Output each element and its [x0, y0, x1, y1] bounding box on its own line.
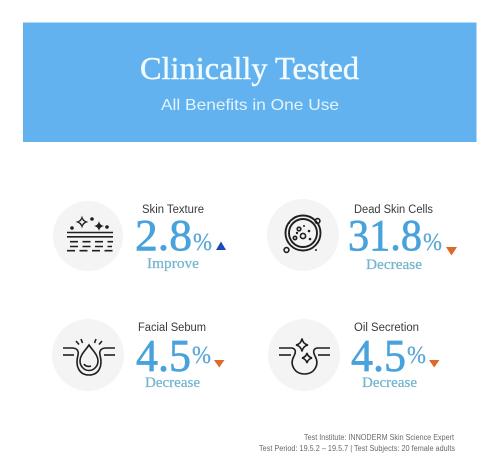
icon: skin texture	[53, 201, 123, 271]
percent sign: %	[407, 342, 426, 369]
result text: Decrease	[366, 257, 422, 273]
panel: facial sebum	[52, 319, 224, 391]
panel: dead skin cells	[267, 199, 457, 273]
header banner	[23, 22, 476, 142]
icon: oil sparkle	[268, 319, 340, 391]
label: Oil Secretion	[354, 322, 419, 334]
value: 2.8	[135, 211, 192, 260]
percent sign: %	[193, 229, 212, 256]
icon: cells	[267, 199, 339, 271]
percent sign: %	[423, 229, 442, 256]
panel: oil secretion	[268, 319, 440, 391]
value: 31.8	[348, 211, 422, 260]
arrow down	[214, 360, 224, 368]
value: 4.5	[136, 330, 191, 381]
result text: Decrease	[362, 375, 417, 391]
panel: skin texture	[53, 201, 226, 272]
arrow down	[446, 247, 457, 256]
label: Facial Sebum	[138, 322, 206, 334]
footnote: Test Period: 19.5.2 – 19.5.7 | Test Subjects: 20 female adults	[259, 444, 455, 453]
label: Dead Skin Cells	[354, 204, 433, 216]
percent sign: %	[192, 342, 211, 369]
icon: sebum drop	[52, 319, 124, 391]
footnote: Test Institute: INNODERM Skin Science Expert	[304, 433, 455, 442]
arrow up	[216, 242, 226, 250]
result text: Decrease	[145, 375, 200, 391]
value: 4.5	[351, 330, 406, 381]
label: Skin Texture	[142, 204, 204, 216]
result text: Improve	[147, 256, 199, 272]
subtitle: All Benefits in One Use	[161, 97, 339, 114]
footnote	[259, 433, 455, 453]
arrow down	[429, 360, 440, 368]
title: Clinically Tested	[140, 50, 359, 86]
